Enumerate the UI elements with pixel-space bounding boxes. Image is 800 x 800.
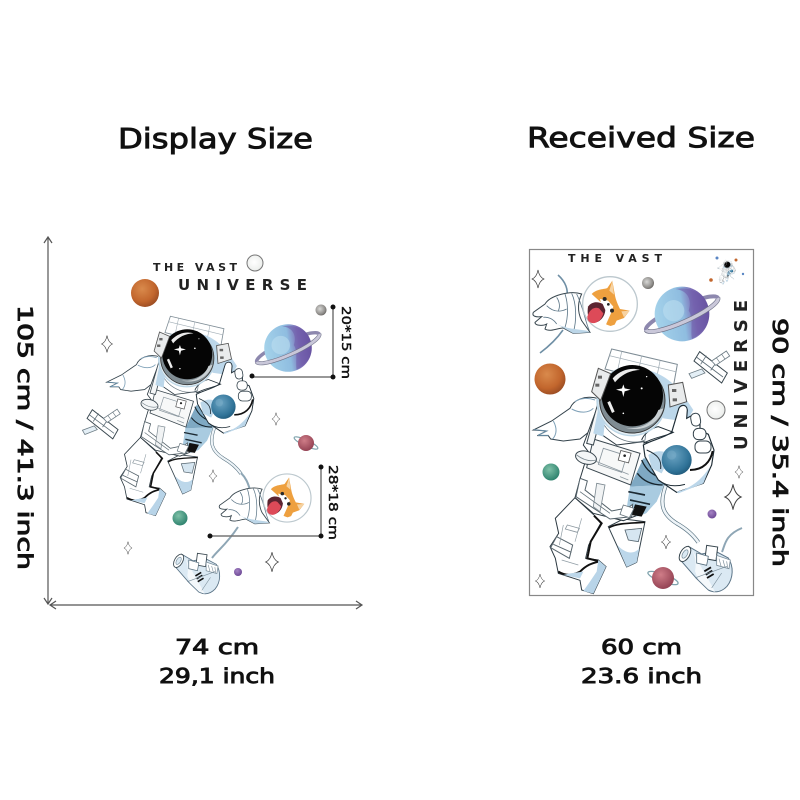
green planet — [172, 510, 188, 526]
sparkles — [532, 270, 743, 588]
width label: received cm: 60 cm — [601, 635, 682, 659]
measure: ringed planet — [250, 304, 336, 380]
gray moon — [642, 277, 654, 289]
moon — [707, 401, 725, 419]
astronaut — [107, 316, 254, 516]
panel: display size decal layout — [13, 237, 362, 609]
satellite — [82, 409, 120, 439]
sheet frame — [530, 250, 754, 596]
measure label: 28*18 cm: 28*18 cm — [326, 465, 341, 540]
astronaut — [533, 349, 714, 594]
pink planet — [293, 435, 319, 451]
purple planet — [234, 568, 242, 576]
thumbnail preview — [709, 256, 744, 284]
heading: received size: Received Size — [527, 121, 755, 154]
green planet — [542, 464, 560, 480]
ringed planet — [643, 287, 721, 341]
moon — [247, 255, 263, 271]
panel: received size sheet — [530, 250, 754, 596]
width label: received inch: 23.6 inch — [581, 664, 702, 688]
measure label: 20*15 cm: 20*15 cm — [339, 306, 354, 379]
tether line — [212, 473, 250, 558]
width label: display inch: 29,1 inch — [159, 664, 275, 688]
orange planet — [131, 279, 159, 307]
ringed planet — [254, 324, 322, 372]
corgi astronaut — [533, 277, 637, 333]
width arrow — [50, 601, 362, 609]
corgi tether — [540, 275, 567, 353]
height label: received: 90 cm / 35.4 inch — [768, 318, 792, 567]
purple planet — [708, 510, 716, 518]
rocket capsule — [677, 544, 732, 592]
sheet title: universe: UNIVERSE — [731, 300, 752, 450]
gray moon — [316, 304, 326, 316]
sheet title: the vast: THE VAST — [568, 252, 662, 265]
corgi astronaut — [219, 474, 311, 524]
measure: corgi astronaut — [208, 464, 324, 538]
height label: 105 cm / 41.3 inch — [13, 305, 37, 570]
pink planet — [647, 567, 679, 589]
satellite — [689, 351, 730, 383]
height arrow — [44, 237, 52, 604]
tether — [722, 528, 742, 552]
orange planet — [534, 364, 566, 394]
width label: display cm: 74 cm — [175, 635, 259, 659]
sparkles — [102, 336, 280, 572]
rocket capsule — [171, 553, 220, 594]
decal title: universe: UNIVERSE — [178, 276, 307, 294]
heading: display size: Display Size — [118, 122, 313, 155]
decal title: the vast: THE VAST — [153, 261, 237, 274]
